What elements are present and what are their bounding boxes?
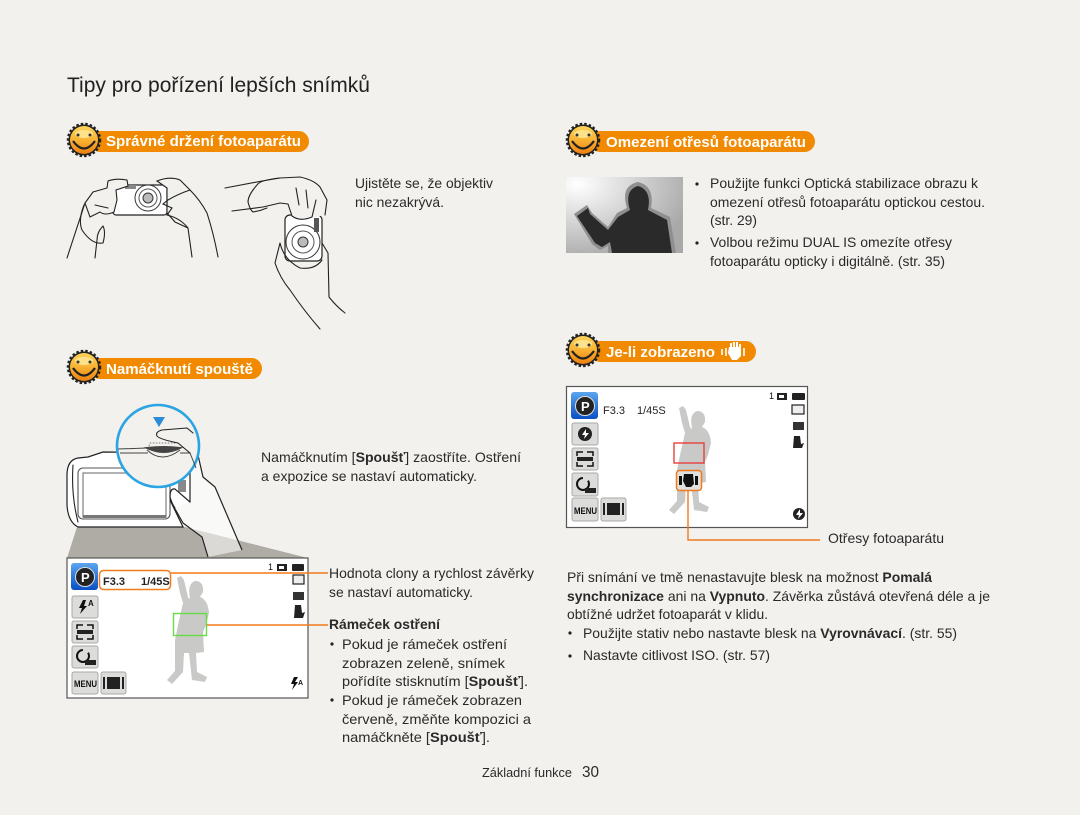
right status icons: A <box>298 680 303 687</box>
left buttons: MENU <box>74 679 97 689</box>
text: stabilisation bullets: Použijte funkci Optická stabilizace obrazu k <box>710 175 979 191</box>
leader line: shake warning <box>688 491 820 540</box>
text: focus frame list <box>329 616 531 745</box>
aperture and shutter values: 1/45S <box>637 405 666 417</box>
text: low light bullets: Použijte stativ nebo nastavte blesk na Vyrovnávací. (str. 55) <box>583 625 957 641</box>
title: Tipy pro pořízení lepších snímků <box>67 74 370 97</box>
text: objective note <box>355 175 493 210</box>
illustration: camera held vertically <box>225 177 345 329</box>
right status icons <box>769 391 805 520</box>
text: low light advice: Při snímání ve tmě nenastavujte blesk na možnost Pomalá <box>567 569 932 585</box>
text: focus frame list: Pokud je rámeček ostření <box>342 636 507 652</box>
heading: Je-li zobrazeno: Je-li zobrazeno <box>606 344 715 361</box>
text: stabilisation bullets <box>695 175 985 269</box>
text: half press explanation: a expozice se nastaví automaticky. <box>261 468 477 484</box>
left buttons <box>72 596 126 694</box>
right status icons: 1 <box>769 391 774 401</box>
illustration: camera with finger on shutter <box>67 452 242 557</box>
photo: shaky silhouette <box>566 177 683 253</box>
red focus frame <box>674 443 704 463</box>
heading: Omezení otřesů fotoaparátu <box>567 124 815 156</box>
icon: shaking hand <box>721 342 745 360</box>
text: focus frame list: zobrazen zeleně, snímek <box>342 655 506 671</box>
illustration: camera held horizontally <box>67 178 218 258</box>
aperture and shutter values: 1/45S <box>141 576 170 588</box>
leader line: aperture <box>171 572 328 574</box>
page footer <box>482 764 599 781</box>
text: stabilisation bullets: omezení otřesů fotoaparátu optickou cestou. <box>710 194 985 210</box>
heading: Namáčknutí spouště <box>68 351 262 383</box>
text: low light bullets <box>568 625 957 663</box>
P mode icon: P <box>581 399 590 414</box>
page footer: 30 <box>582 764 599 781</box>
aperture and shutter values: F3.3 <box>103 576 125 588</box>
P mode icon: P <box>81 570 90 585</box>
text: stabilisation bullets: (str. 29) <box>710 212 757 228</box>
page footer: Základní funkce <box>482 765 572 780</box>
left buttons <box>572 423 626 521</box>
left buttons: MENU <box>574 506 597 516</box>
text: focus frame list: červeně, změňte kompozici a <box>342 711 531 727</box>
text: objective note: Ujistěte se, že objektiv <box>355 175 493 191</box>
text: low light advice: obtížné udržet fotoaparát v klidu. <box>567 606 768 622</box>
text: half press explanation <box>261 449 521 484</box>
illustration: magnified shutter button <box>117 405 199 487</box>
shake warning icon <box>676 470 702 490</box>
aperture and shutter values: F3.3 <box>603 405 625 417</box>
text: focus frame list: Rámeček ostření <box>329 616 441 632</box>
panel: camera screen with focus frame <box>67 558 308 698</box>
text: low light bullets: Nastavte citlivost ISO. (str. 57) <box>583 647 770 663</box>
P mode icon <box>571 392 598 419</box>
leader line: focus frame <box>207 624 328 626</box>
text: focus frame list: namáčkněte [ Spoušť]. <box>342 729 490 745</box>
text: shake label: Otřesy fotoaparátu <box>828 530 944 546</box>
text: aperture and shutter note: Hodnota clony a rychlost závěrky <box>329 565 534 581</box>
text: low light advice <box>567 569 990 622</box>
left buttons: A <box>88 599 94 608</box>
panel: camera screen with shake warning <box>566 386 808 528</box>
text: objective note: nic nezakrývá. <box>355 194 444 210</box>
green focus frame <box>174 614 206 636</box>
text: stabilisation bullets: Volbou režimu DUAL IS omezíte otřesy <box>710 234 952 250</box>
heading: Je-li zobrazeno <box>567 334 756 366</box>
heading: Správné držení fotoaparátu <box>68 124 309 156</box>
heading: Namáčknutí spouště: Namáčknutí spouště <box>106 361 253 378</box>
right status icons: 1 <box>268 562 273 572</box>
P mode icon <box>71 563 98 590</box>
text: focus frame list: pořídíte stisknutím [ Spoušť]. <box>342 673 528 689</box>
text: focus frame list: Pokud je rámeček zobrazen <box>342 692 522 708</box>
text: low light advice: synchronizace ani na Vypnuto. Závěrka zůstává otevřená déle a je <box>567 588 990 604</box>
illustration: gray projection from camera to screen <box>67 527 308 558</box>
person silhouette <box>669 406 711 514</box>
text: half press explanation: Namáčknutím [Spoušť] zaostříte. Ostření <box>261 449 521 465</box>
right status icons <box>268 562 305 690</box>
heading: Omezení otřesů fotoaparátu: Omezení otřesů fotoaparátu <box>606 134 806 151</box>
text: aperture and shutter note: se nastaví automaticky. <box>329 584 473 600</box>
aperture and shutter values <box>100 570 170 590</box>
text: aperture and shutter note <box>329 565 534 600</box>
aperture and shutter values <box>603 405 666 417</box>
person silhouette <box>167 576 209 684</box>
heading: Správné držení fotoaparátu: Správné držení fotoaparátu <box>106 133 301 150</box>
text: stabilisation bullets: fotoaparátu opticky i digitálně. (str. 35) <box>710 253 945 269</box>
